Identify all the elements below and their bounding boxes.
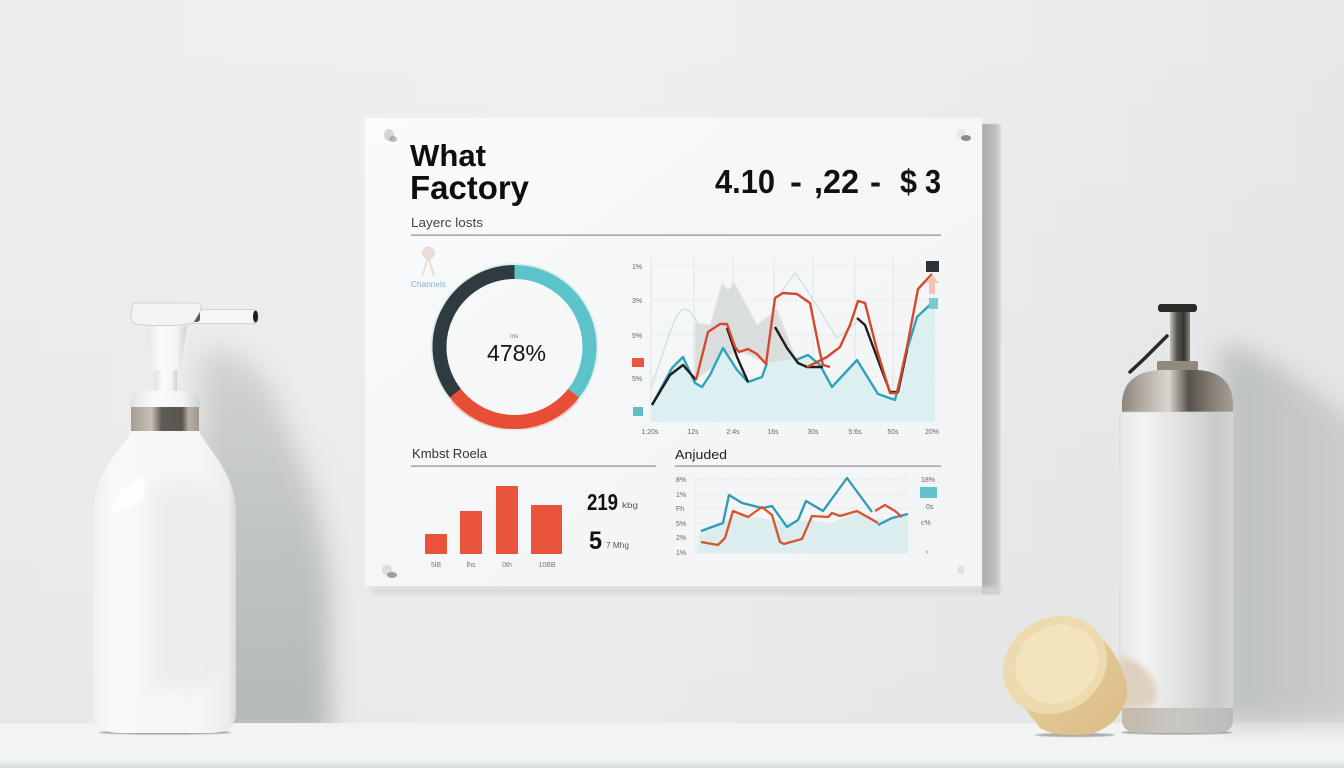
x-axis labels: 1:20s [641,429,659,436]
subtitle: Layerc losts [411,215,484,230]
title: What [410,138,486,173]
y-axis labels: 3% [632,298,642,305]
title: Factory [410,169,530,206]
legend markers [632,261,939,416]
x-axis labels: 30s [807,429,819,436]
highlight [112,478,145,512]
grid [651,258,936,422]
headline figures: ,22 [814,163,859,200]
y-axis labels [632,264,642,383]
x-axis labels: 16s [767,429,779,436]
x-axis labels: 20% [925,429,939,436]
plunger [1157,304,1198,371]
area [696,512,908,553]
headline figures [715,163,941,200]
section: bar chart heading: Kmbst Roela [412,446,488,461]
legend: 18% [921,477,935,484]
headline figures: 4.10 [715,163,775,200]
panel: dashboard poster [365,118,982,586]
left pump bottle [93,303,258,734]
x-axis labels: 2:4s [726,429,740,436]
gridlines [695,478,908,553]
bar labels: 10BB [538,562,556,569]
blue line [701,478,908,531]
base [1122,708,1233,733]
contact shadow [1035,733,1115,737]
teal area [652,300,935,422]
mounting pins [382,129,971,578]
round cream cap [984,597,1127,737]
x-axis labels [641,429,939,436]
y-axis labels: 5% [632,376,642,383]
line chart: adjusted [676,477,937,557]
metal dome [1122,370,1233,412]
headline figures: - [790,163,802,200]
donut chart [432,264,598,430]
cap side [1020,625,1127,735]
metal collar [131,407,199,431]
body inner shading [148,478,217,692]
pump head [131,303,201,326]
red line [701,505,902,545]
shadow of right bottle [1220,345,1344,723]
teal line [652,300,935,405]
section: adjusted heading: Anjuded [675,447,727,462]
headline figures: 3 [925,163,941,200]
legend [920,477,937,556]
bottle body [93,431,236,733]
x-axis labels: 50s [887,429,899,436]
y-axis labels: 5% [632,333,642,340]
spout [192,310,258,324]
contact shadow [99,730,231,734]
right metal-top bottle [1120,304,1233,734]
bar labels [431,562,556,569]
clip [1130,336,1167,372]
line chart: main [632,258,939,436]
pale outline [651,273,857,387]
donut centre label: 478% [487,340,546,366]
warm reflection [1120,655,1157,708]
contact shadow [1121,730,1233,734]
cap [130,390,200,407]
red line [696,274,932,393]
stats: 5 [589,527,602,555]
y-axis labels: 1% [676,550,686,557]
y-axis labels: 5% [676,521,686,528]
shadow of left bottle [200,349,330,740]
x-axis labels: 12s [687,429,699,436]
headline figures: $ [900,163,917,200]
cap inner [1000,609,1114,719]
icon: small figure [422,248,434,276]
poster shadow [372,124,1001,594]
stats [587,489,638,555]
y-axis labels [676,477,686,557]
y-axis labels: 2% [676,535,686,542]
headline figures: - [870,163,881,200]
legend: › [926,549,929,556]
bar labels: 0th [502,562,512,569]
pump neck [146,326,187,393]
bar chart [425,486,562,569]
x-axis labels: 5:6s [848,429,862,436]
y-axis labels: 1% [676,492,686,499]
bar labels: 5lB [431,562,441,569]
donut centre label: ms [510,334,518,340]
stats: kbg [622,501,638,510]
body [1120,412,1233,708]
black line [652,318,907,405]
legend: 0s [926,504,934,511]
shelf [0,723,1344,768]
bar labels: lhs [467,562,476,569]
stats: 7 Mhg [606,541,629,550]
legend: c% [921,520,931,527]
grey area [695,282,797,380]
y-axis labels: Fh [676,506,684,513]
cap face [984,597,1126,733]
title [410,138,530,206]
y-axis labels: 8% [676,477,686,484]
stats: 219 [587,489,618,515]
y-axis labels: 1% [632,264,642,271]
icon caption: Channels [411,280,446,289]
